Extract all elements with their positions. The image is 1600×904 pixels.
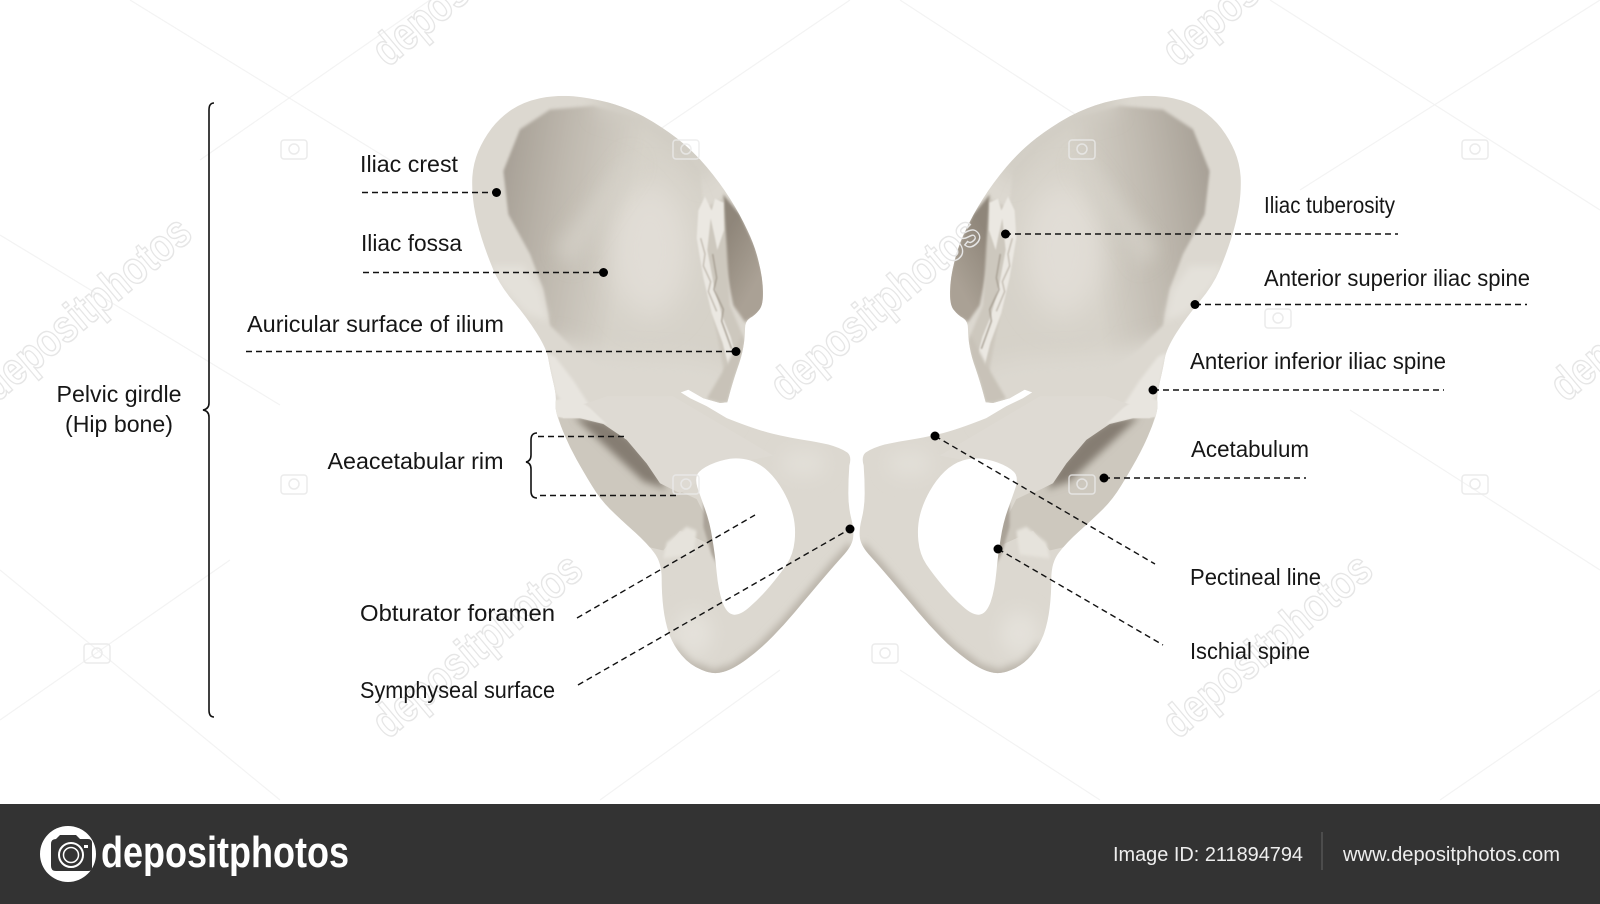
callout: Auricular surface of ilium	[246, 311, 740, 356]
callout: Anterior inferior iliac spine	[1148, 348, 1446, 394]
callout: Iliac tuberosity: Iliac tuberosity	[1264, 192, 1395, 218]
logo wordmark: depositphotos	[101, 828, 349, 877]
callout: Anterior inferior iliac spine: Anterior inferior iliac spine	[1190, 348, 1446, 374]
callout: Iliac crest: Iliac crest	[360, 151, 458, 177]
footer separator	[1321, 832, 1323, 870]
callout: Acetabulum	[1100, 436, 1309, 482]
watermark text: depositphotos	[1151, 542, 1382, 748]
callout: Ischial spine: Ischial spine	[1190, 638, 1310, 664]
website url: www.depositphotos.com	[1342, 843, 1560, 866]
bracket: pelvic girdle	[203, 103, 214, 717]
callout: Obturator foramen	[360, 515, 755, 626]
callout: Pectineal line	[930, 432, 1321, 590]
label: Pelvic girdle (Hip bone): (Hip bone)	[65, 411, 173, 437]
callout: Iliac crest	[360, 151, 501, 197]
callout: Obturator foramen: Obturator foramen	[360, 600, 555, 626]
callout: Pectineal line: Pectineal line	[1190, 564, 1321, 590]
label: Pelvic girdle (Hip bone)	[56, 381, 182, 437]
watermark camera icons	[84, 140, 1488, 663]
left hip bone	[440, 80, 880, 713]
callout: Aeacetabular rim with brace: Aeacetabular rim	[328, 448, 504, 474]
callout: Ischial spine	[994, 544, 1310, 664]
callout: Iliac fossa	[361, 230, 608, 277]
watermark text: depositphotos	[759, 205, 990, 411]
image id: Image ID: 211894794	[1113, 843, 1303, 866]
callout: Symphyseal surface: Symphyseal surface	[360, 677, 555, 703]
watermark text: depositphotos	[361, 542, 592, 748]
callout: Acetabulum: Acetabulum	[1191, 436, 1309, 462]
icon: camera logo	[40, 826, 96, 882]
callout: Aeacetabular rim with brace	[328, 433, 680, 498]
callout: Iliac tuberosity	[1001, 192, 1398, 238]
callout: Anterior superior iliac spine	[1190, 265, 1530, 309]
callout: Symphyseal surface	[360, 524, 854, 703]
footer bar	[0, 804, 1600, 904]
label: Pelvic girdle (Hip bone): Pelvic girdle	[56, 381, 182, 407]
callout: Auricular surface of ilium: Auricular surface of ilium	[247, 311, 504, 337]
right hip bone	[833, 80, 1273, 713]
callout: Anterior superior iliac spine: Anterior superior iliac spine	[1264, 265, 1530, 291]
callout: Iliac fossa: Iliac fossa	[361, 230, 463, 256]
